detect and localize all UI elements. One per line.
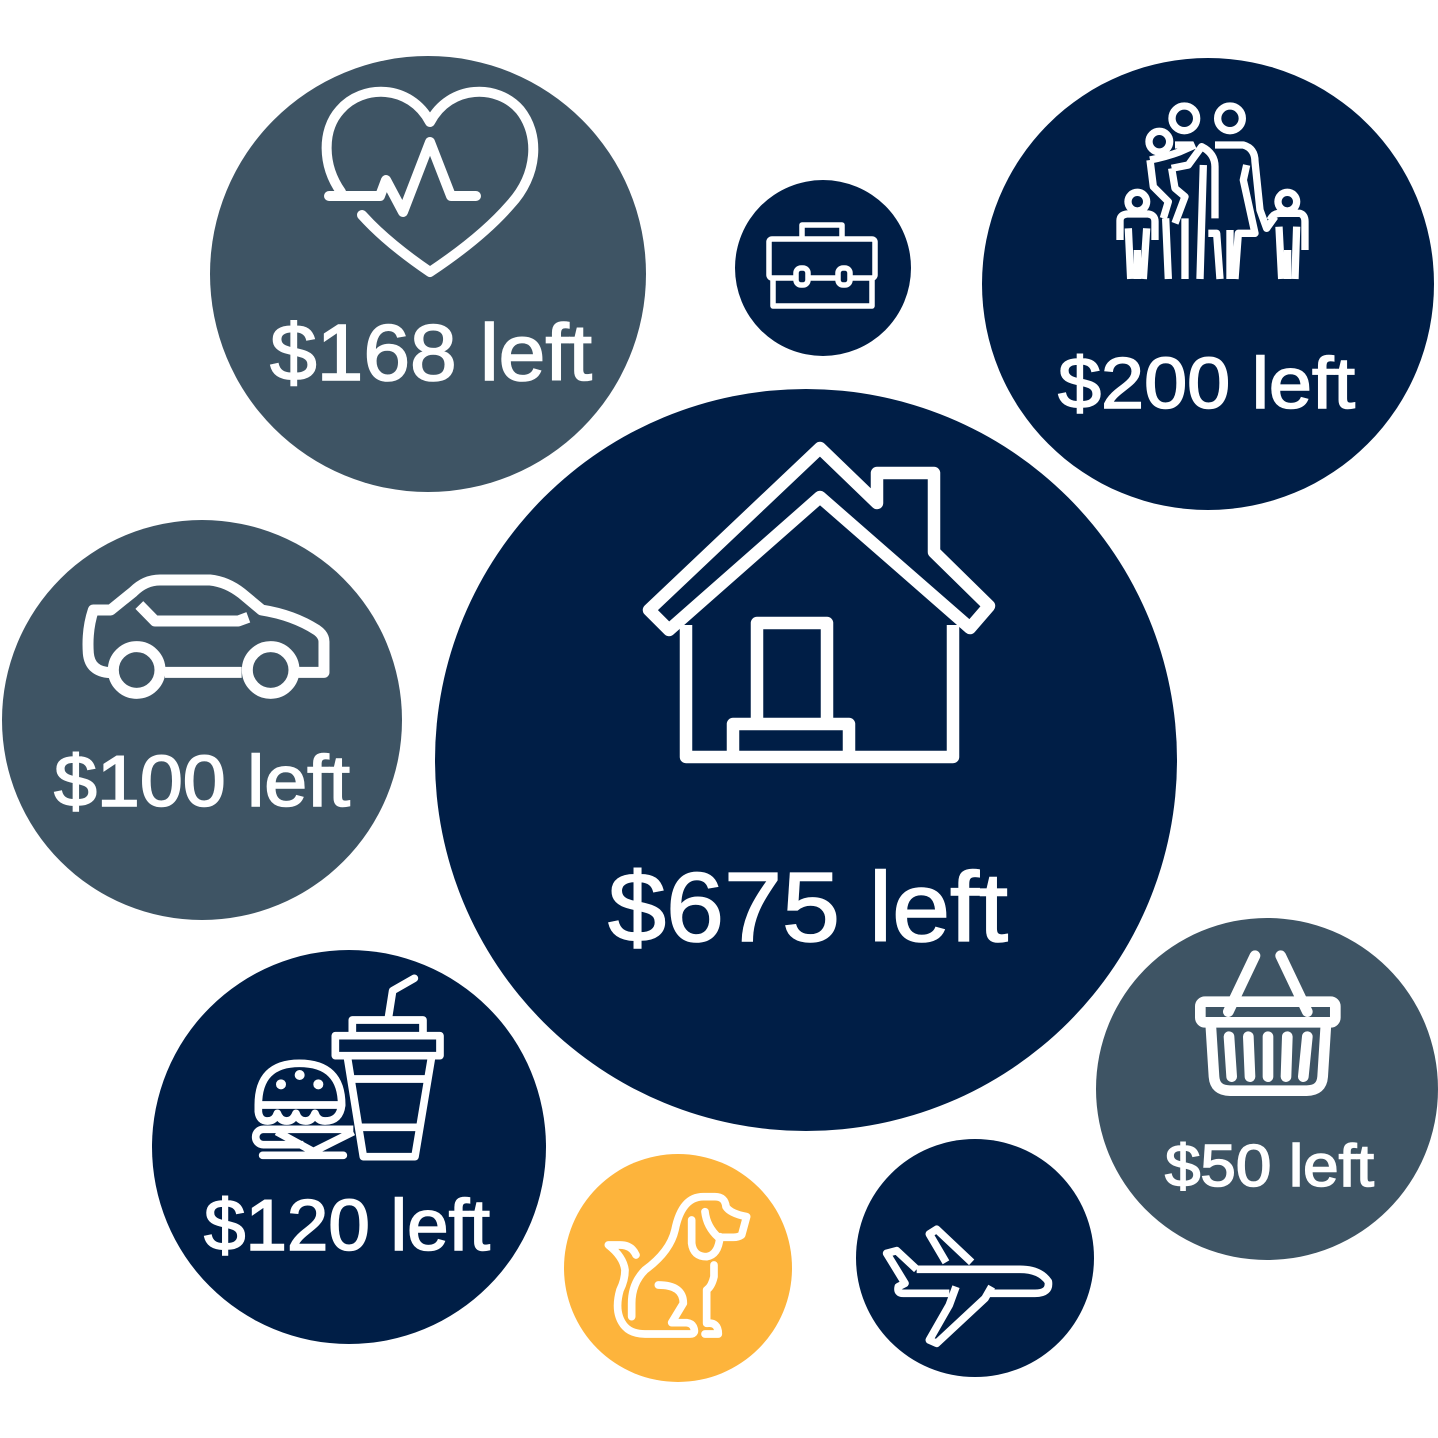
icon: burger and drink <box>256 978 440 1157</box>
label: $100 left: $100 left <box>54 742 350 822</box>
icon: airplane <box>887 1229 1048 1343</box>
icon: car <box>88 580 324 693</box>
panel: travel <box>856 1139 1094 1377</box>
panel: car <box>2 520 402 920</box>
panel: groceries <box>1096 918 1438 1260</box>
label: $200 left: $200 left <box>1058 344 1355 424</box>
panel: family <box>982 58 1434 510</box>
panel: pets <box>564 1154 792 1382</box>
icon: basket <box>1200 956 1335 1091</box>
label: $675 left: $675 left <box>608 852 1008 962</box>
label: $120 left: $120 left <box>204 1186 490 1266</box>
icon: heart with pulse <box>327 92 533 272</box>
label: $168 left: $168 left <box>270 308 592 397</box>
label: $50 left: $50 left <box>1165 1133 1374 1199</box>
icon: family <box>1120 106 1305 279</box>
panel: housing <box>435 389 1177 1131</box>
icon: house <box>649 448 989 757</box>
panel: work <box>735 180 911 356</box>
panel: health <box>210 56 646 492</box>
panel: food <box>152 950 546 1344</box>
icon: briefcase <box>769 225 875 306</box>
icon: dog <box>608 1197 747 1334</box>
